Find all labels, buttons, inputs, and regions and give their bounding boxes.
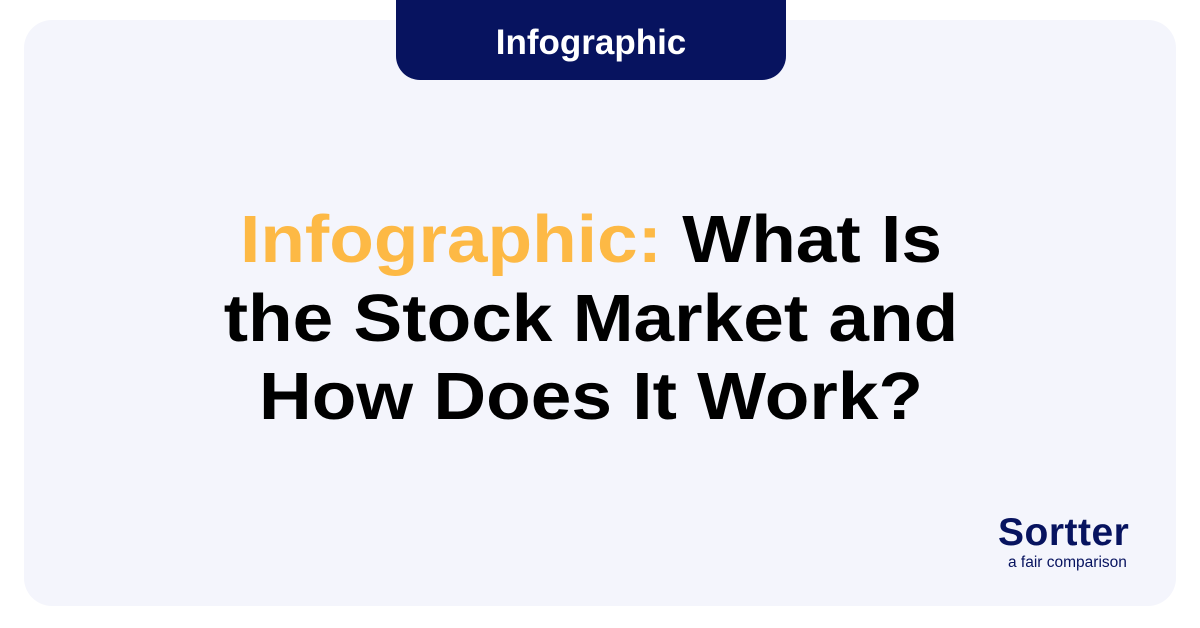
logo: Sortter: Sortter [998, 511, 1129, 554]
tab: Infographic label [396, 0, 786, 80]
tab: Infographic label: Infographic [496, 23, 686, 62]
title: the Stock Market and [224, 280, 958, 356]
title: Infographic: What Is [240, 202, 942, 277]
title [224, 202, 958, 434]
logo: Sortter: a fair comparison [1008, 554, 1127, 571]
title: How Does It Work? [259, 359, 923, 434]
